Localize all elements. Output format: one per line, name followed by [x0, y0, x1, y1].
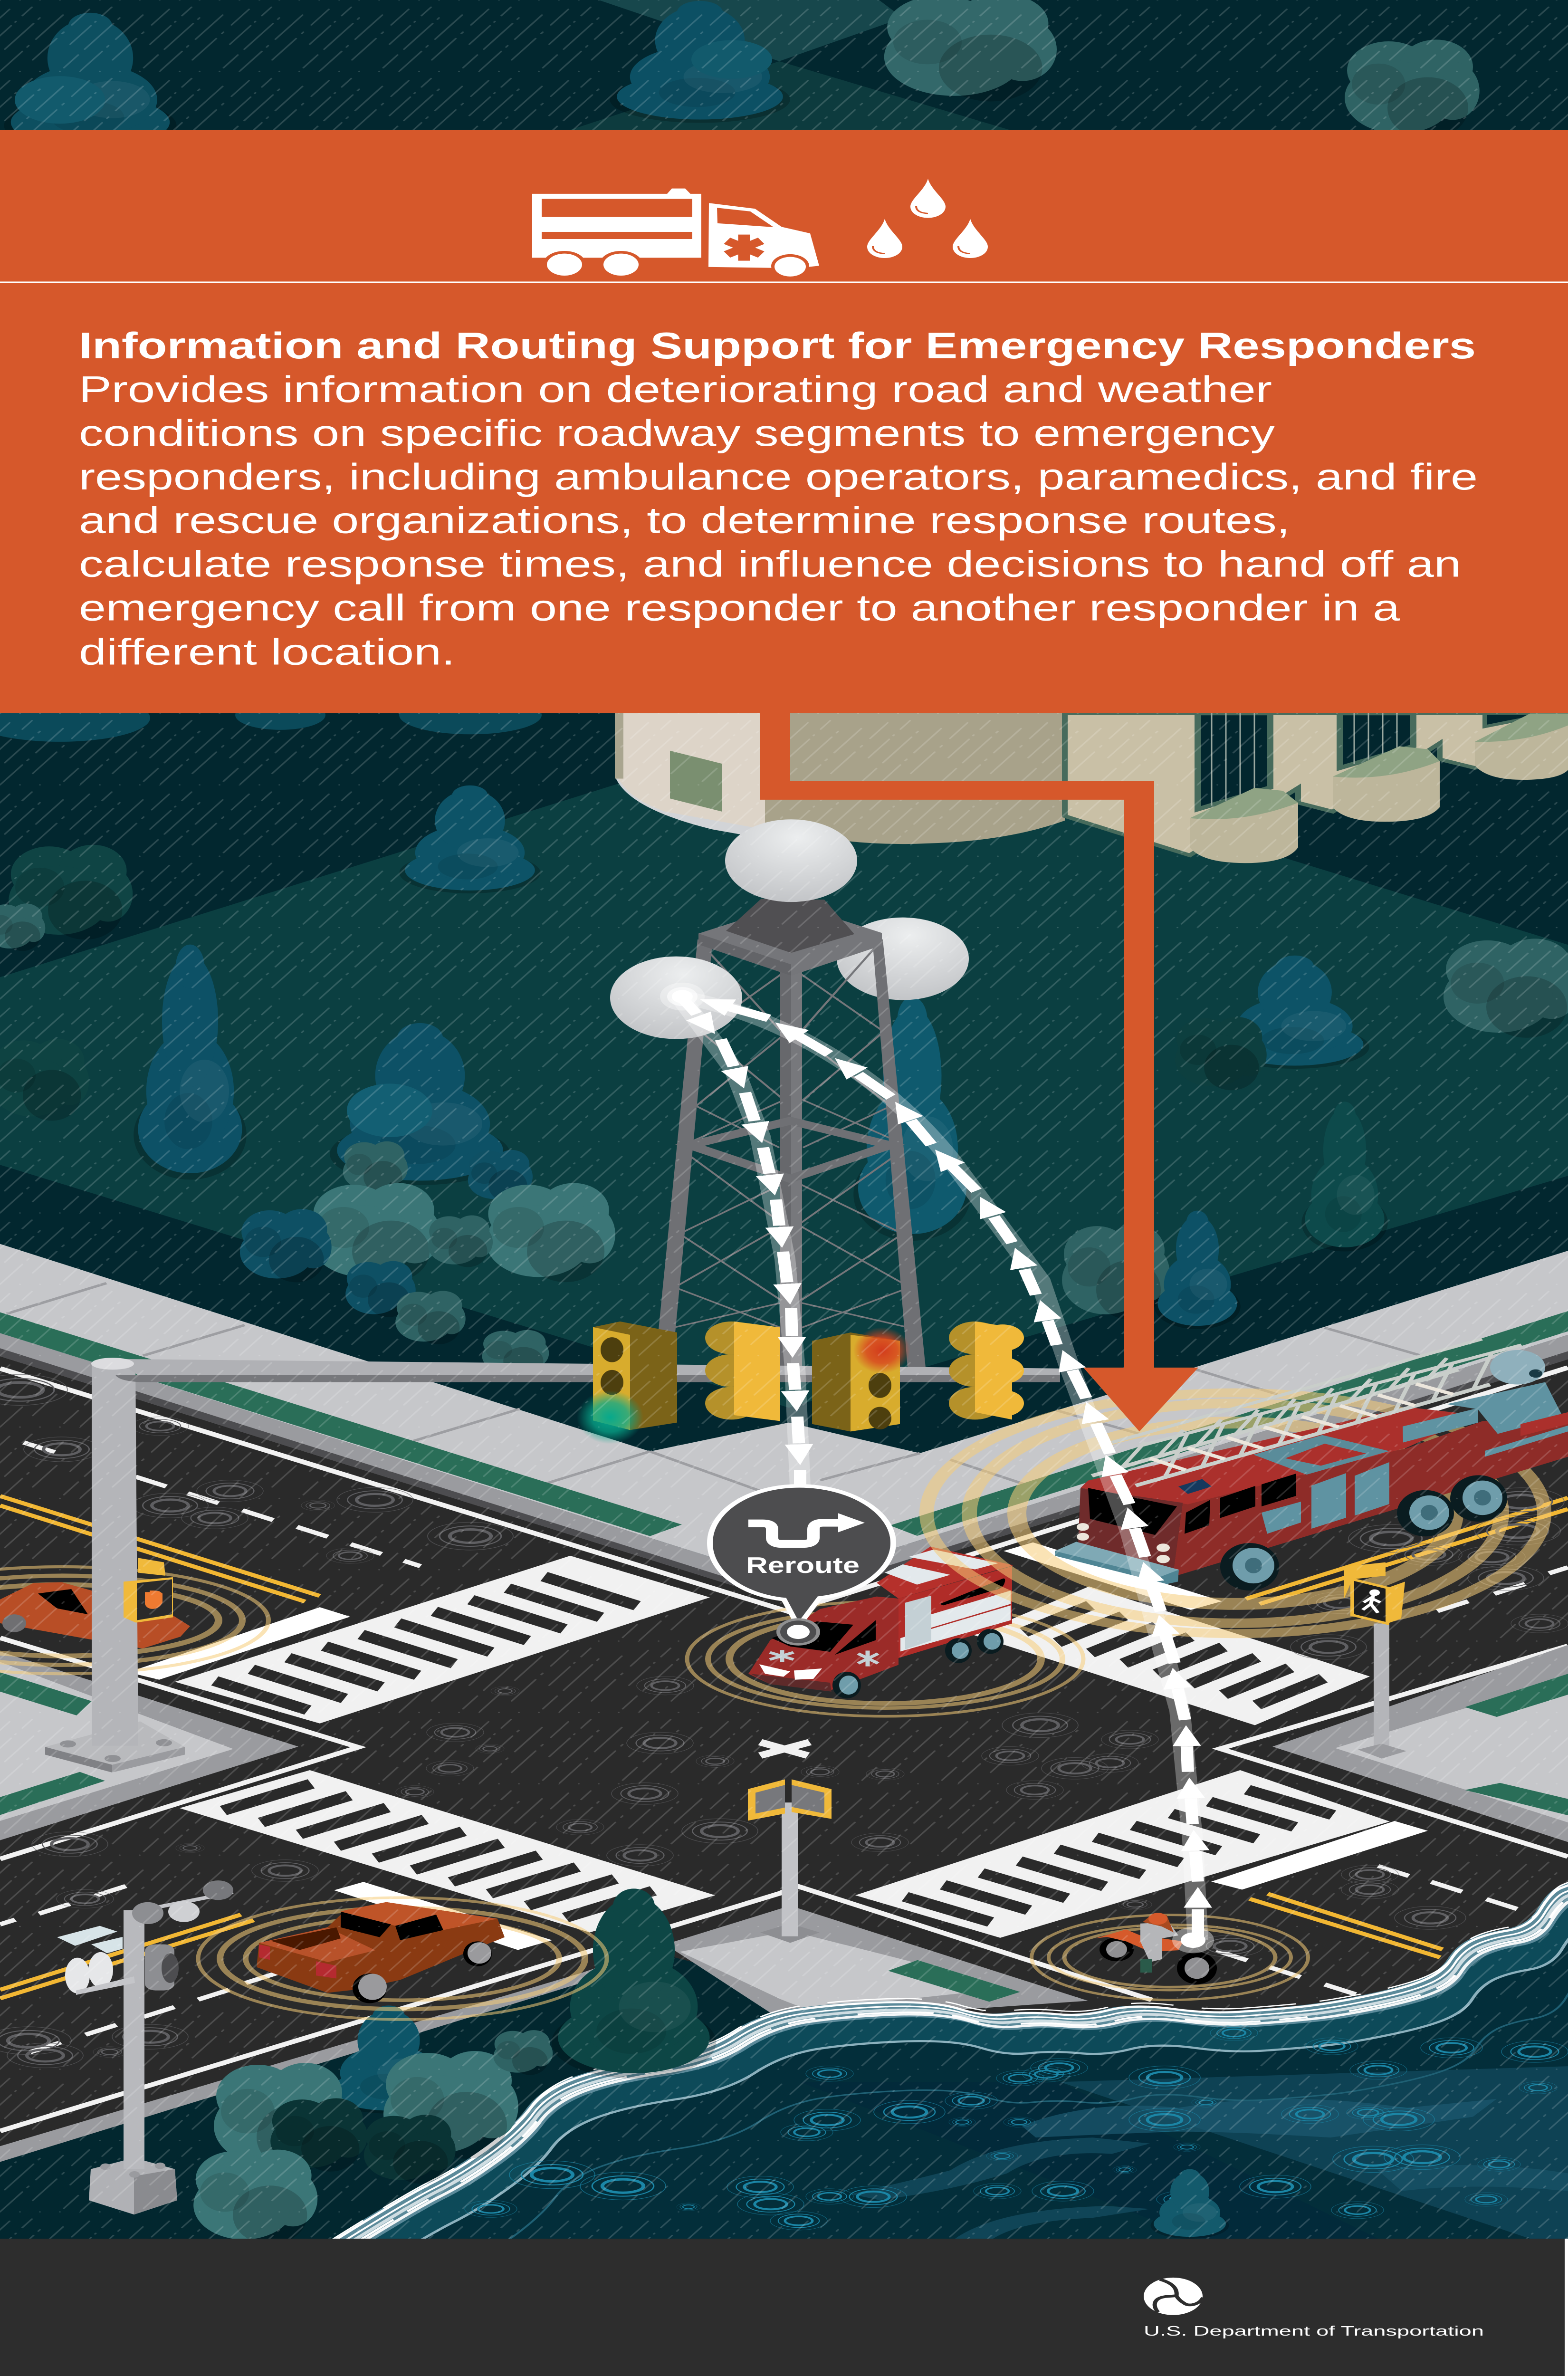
traffic signal 2 rear [705, 1322, 780, 1421]
traffic signal 4 rear [949, 1322, 1024, 1419]
fire truck windows [1088, 1474, 1296, 1535]
lawn [0, 718, 1568, 1408]
upward white arrows from vehicles to tower [700, 999, 1198, 1940]
tower left dome [610, 957, 742, 1039]
ambulance box [899, 1566, 1012, 1658]
double yellow lines [0, 1496, 1568, 1998]
reroute label: Reroute [746, 1553, 860, 1578]
water ripples [465, 2025, 1568, 2230]
building bays [1190, 714, 1568, 863]
rear signal head [748, 1779, 832, 1820]
motorcycle rings [1032, 1915, 1308, 2000]
traffic signal 1 with green light [577, 1322, 677, 1444]
fire truck bumper [1055, 1542, 1179, 1584]
traffic signal 3 with red light [812, 1327, 910, 1431]
stop lines [128, 1542, 1428, 1950]
orange text banner [0, 130, 1568, 713]
green strips [0, 1311, 1568, 1536]
sensor insulators [65, 1952, 135, 1995]
fire truck panels [1262, 1408, 1568, 1534]
communication tower [610, 819, 969, 1368]
motorcycle [1095, 1913, 1217, 1984]
glow at left dome [660, 983, 705, 1011]
fire truck wheels [1220, 1475, 1507, 1590]
ambulance headlights [759, 1664, 822, 1680]
pickup body [257, 1902, 505, 1993]
motorcycle with signal rings [1032, 1913, 1308, 2000]
body text: and rescue organizations, to determine response routes, [79, 500, 1290, 541]
curb top [0, 1333, 1568, 1603]
reroute callout bubble [710, 1486, 893, 1646]
body text: conditions on specific roadway segments to emergency [79, 412, 1275, 454]
lawn trees left [0, 786, 615, 1375]
glow at motorcycle [1172, 1927, 1214, 1953]
ambulance wheels [832, 1629, 1004, 1698]
shoreline foam [331, 1881, 1568, 2331]
footer label: U.S. Department of Transportation [1144, 2323, 1484, 2339]
fire truck ladder [1092, 1339, 1521, 1485]
solar panel [57, 1926, 123, 1953]
orange connector arrow [760, 713, 1198, 1431]
tower rear dome [837, 918, 969, 1000]
pickup truck with signal rings [198, 1897, 607, 2020]
translucent signal beams [680, 997, 1198, 1940]
fire truck with signal rings [927, 1339, 1568, 1634]
body text: different location. [79, 632, 455, 673]
crosswalk southwest [180, 1770, 715, 1933]
icon: DOT logo [1144, 2278, 1203, 2315]
center signal post with sign [748, 1742, 832, 1943]
sidewalk top corner [0, 1244, 1568, 1581]
side sidewalk left [0, 1651, 298, 1840]
building [615, 713, 1568, 863]
sensor cylinder [145, 1945, 179, 1991]
left pedestrian signal [124, 1558, 173, 1623]
building windows [1198, 713, 1530, 809]
fire truck rings [927, 1393, 1544, 1634]
footer bar [0, 2239, 1568, 2376]
fire truck beacon [1178, 1479, 1212, 1494]
sidewalk joints [7, 1283, 1419, 1491]
upper lawn behind banner [570, 0, 1010, 130]
fire truck turret [1447, 1350, 1568, 1436]
ambulance stars [770, 1650, 878, 1667]
road surface [0, 1350, 1568, 2239]
body text [79, 369, 1478, 673]
submerged road patches [800, 2066, 1568, 2239]
mast arm [114, 1359, 1060, 1382]
sidewalk bottom centre [665, 1906, 1088, 2022]
pickup wheels [353, 1941, 492, 2003]
tower legs [655, 939, 926, 1368]
icon: ambulance [532, 189, 819, 278]
lane dashes [0, 1443, 1568, 2052]
center X marking [760, 1742, 810, 1755]
ambulance with signal rings [687, 1547, 1083, 1716]
hand icon [145, 1590, 163, 1609]
tower lattice [668, 948, 915, 1329]
trees above banner [4, 0, 1480, 152]
left orange car with signal rings [0, 1567, 268, 1674]
road puddle ripples [0, 1374, 1568, 2068]
tree bases below banner [0, 694, 542, 742]
mast arm signal pole [45, 1358, 1060, 1772]
bottom ground left and curb [0, 1945, 808, 2239]
lower trees [193, 1888, 1229, 2244]
lawn trees right [853, 939, 1568, 1329]
weather station pole [57, 1880, 233, 2214]
reroute icon [748, 1513, 865, 1544]
right pedestrian signal [1344, 1562, 1406, 1759]
anemometer [132, 1880, 233, 1924]
left car rings [0, 1567, 268, 1674]
crosswalk northeast [974, 1586, 1370, 1725]
tower top dome [725, 819, 857, 902]
ambulance cab [748, 1597, 899, 1690]
fire truck headlights [1077, 1523, 1170, 1563]
road edge lines [0, 1368, 1568, 2131]
tower platform [698, 899, 882, 976]
ambulance rings [687, 1601, 1083, 1716]
icon: rain drops [867, 179, 988, 258]
weather station base [89, 2158, 177, 2214]
crosswalk northwest [175, 1556, 710, 1724]
fire truck body [1173, 1415, 1568, 1577]
body text: Provides information on deteriorating road and weather [79, 369, 1272, 410]
floodwater [328, 1881, 1568, 2331]
crosswalk southeast [855, 1770, 1390, 1938]
pickup rings [198, 1897, 607, 2020]
left car body [0, 1582, 190, 1648]
side sidewalk right [1272, 1645, 1568, 1842]
downward white arrows from tower to ambulance [684, 1000, 800, 1489]
pole base plate [45, 1721, 185, 1772]
walking figure icon [1363, 1590, 1380, 1613]
bubble pin [776, 1618, 820, 1646]
